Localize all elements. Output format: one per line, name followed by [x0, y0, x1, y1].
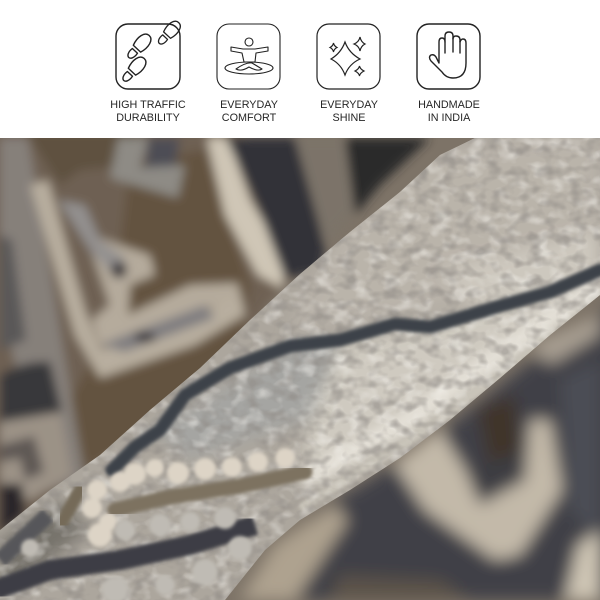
label: high traffic durability: HIGH TRAFFIC: [110, 99, 186, 111]
cream stepped lines: [30, 180, 245, 378]
light tufts lower area: [21, 507, 252, 600]
icon: sparkles: [317, 24, 380, 89]
label: handmade in india: IN INDIA: [428, 112, 471, 124]
blurred rug background pattern: [0, 130, 430, 540]
label: everyday shine: SHINE: [332, 112, 366, 124]
yarn texture: [0, 130, 600, 600]
light lower edge highlight: [300, 282, 600, 480]
icon: footprints: [116, 18, 183, 89]
icon: seated figure: [217, 24, 280, 89]
brown stripe: [115, 472, 305, 510]
label: everyday comfort: EVERYDAY: [220, 99, 278, 111]
label: handmade in india: HANDMADE: [418, 99, 480, 111]
dark lower stripe: [0, 525, 255, 590]
icon: hand: [417, 24, 480, 89]
cream bumps: [82, 448, 295, 547]
label: high traffic durability: DURABILITY: [116, 112, 180, 124]
dark wavy stripe: [112, 270, 600, 470]
label: everyday comfort: COMFORT: [222, 112, 277, 124]
label: everyday shine: EVERYDAY: [320, 99, 378, 111]
photo: rolled rug close-up: [0, 130, 600, 600]
rug roll: [0, 130, 600, 600]
